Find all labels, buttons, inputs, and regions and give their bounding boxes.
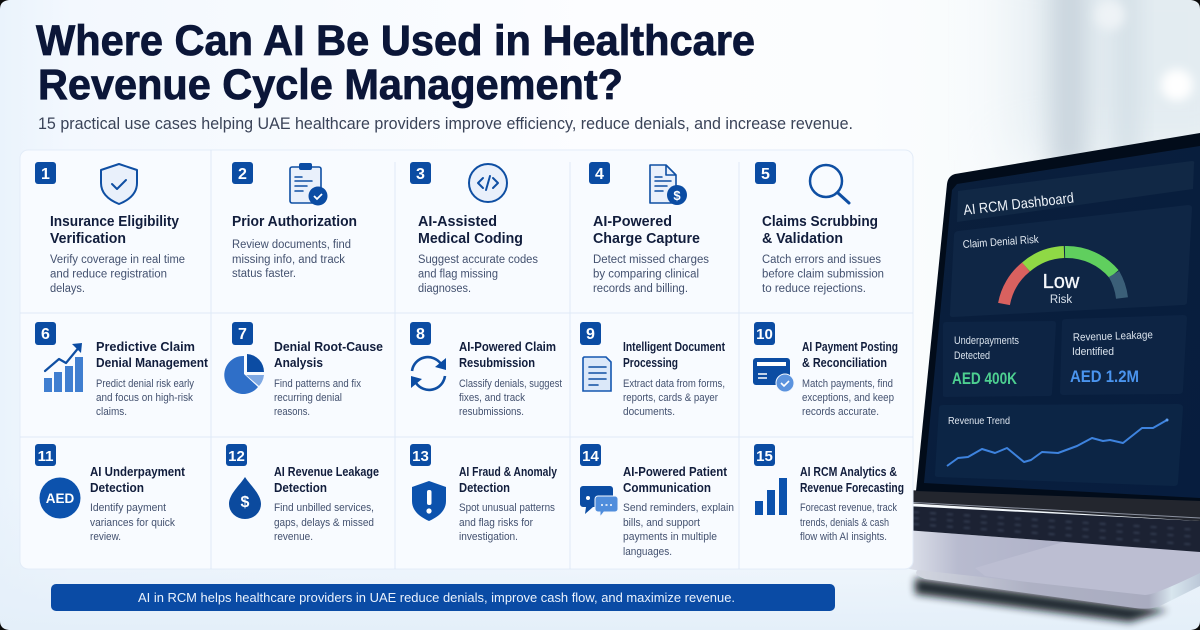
header bar (957, 161, 1194, 222)
KPI: revenue leakage (1060, 315, 1187, 395)
description: Find unbilled services, (274, 502, 374, 514)
icon: magnifier (810, 165, 849, 203)
description (762, 254, 884, 295)
card 8: AI-powered claim resubmission (410, 322, 562, 418)
badge 12 (226, 444, 247, 466)
description: Match payments, find (802, 378, 893, 390)
icon: alert shield (412, 481, 446, 521)
heading: AI Fraud & Anomaly (459, 464, 558, 479)
badge 11: 11 (38, 448, 53, 465)
description: gaps, delays & missed (274, 517, 374, 529)
description: status faster. (232, 268, 296, 280)
badge 10: 10 (756, 326, 773, 343)
heading (459, 464, 558, 495)
description (459, 502, 555, 543)
description: payments in multiple (623, 531, 717, 543)
icon: payment card check (753, 358, 794, 392)
description (96, 378, 194, 418)
claim denial risk gauge: Risk (1050, 294, 1072, 306)
card 11: AI underpayment detection (35, 444, 186, 543)
badge 10 (754, 322, 775, 345)
description: and reduce registration (50, 268, 167, 280)
badge 3: 3 (416, 166, 425, 183)
description: fixes, and track (459, 392, 525, 404)
badge 7 (232, 322, 253, 345)
heading (418, 214, 523, 247)
heading: AI-Assisted (418, 214, 497, 230)
badge 6: 6 (41, 326, 50, 343)
description: Find patterns and fix (274, 378, 361, 390)
description: reasons. (274, 406, 310, 418)
description: and flag missing (418, 268, 498, 280)
laptop base (905, 530, 1200, 622)
card 5: claims scrubbing and validation (755, 162, 884, 295)
description: reports, cards & payer (623, 392, 718, 404)
description (418, 254, 538, 295)
description (90, 502, 175, 543)
description: Suggest accurate codes (418, 254, 538, 266)
description (232, 239, 351, 280)
description (802, 378, 894, 418)
badge 5: 5 (761, 166, 770, 183)
heading (50, 214, 179, 247)
heading: Detection (459, 480, 510, 495)
heading: AI Payment Posting (802, 339, 898, 354)
description: Verify coverage in real time (50, 254, 185, 266)
heading (800, 464, 904, 495)
description (274, 378, 361, 418)
heading (623, 464, 728, 495)
KPI: underpayments (943, 321, 1056, 397)
description: Forecast revenue, track (800, 502, 897, 514)
laptop with AI RCM dashboard (905, 133, 1200, 622)
description (800, 502, 897, 543)
icon: AED coin (40, 478, 80, 518)
KPI: revenue leakage: Identified (1072, 346, 1114, 358)
blurred office backdrop (1020, 0, 1200, 170)
description: bills, and support (623, 517, 700, 529)
card 7: denial root-cause analysis (224, 322, 383, 418)
card 2: prior authorization (232, 162, 357, 280)
heading: Detection (90, 480, 144, 495)
badge 14: 14 (582, 448, 599, 465)
description: Detect missed charges (593, 254, 709, 266)
description (459, 378, 562, 418)
card 9: intelligent document processing (580, 322, 726, 418)
description: Predict denial risk early (96, 378, 194, 390)
KPI: revenue leakage: AED 1.2M (1070, 367, 1139, 386)
description: variances for quick (90, 517, 175, 529)
description: records accurate. (802, 406, 879, 418)
claim denial risk gauge: Claim Denial Risk (962, 234, 1039, 251)
description: records and billing. (593, 283, 688, 295)
card 14: AI-powered patient communication (580, 444, 734, 558)
description (593, 254, 709, 295)
badge 15: 15 (756, 448, 773, 465)
heading: Revenue Forecasting (800, 480, 904, 495)
heading: Denial Root-Cause (274, 339, 383, 354)
title: Where Can AI Be Used in Healthcare (36, 17, 755, 65)
heading (762, 214, 878, 247)
description: review. (90, 531, 121, 543)
badge 8: 8 (416, 326, 425, 343)
keyboard (905, 506, 1200, 552)
KPI: underpayments: AED 400K (952, 369, 1018, 388)
description: recurring denial (274, 392, 342, 404)
KPI: underpayments: Underpayments (954, 335, 1019, 347)
heading: Detection (274, 480, 327, 495)
description: diagnoses. (418, 283, 471, 295)
description: investigation. (459, 531, 518, 543)
icon: bar chart (755, 478, 787, 515)
card 3: AI-assisted medical coding (410, 162, 538, 295)
heading (593, 214, 700, 247)
badge 8 (410, 322, 431, 345)
description: Review documents, find (232, 239, 351, 251)
card 10: AI payment posting and reconciliation (753, 322, 898, 418)
badge 13 (410, 444, 431, 466)
heading (274, 464, 379, 495)
description: Extract data from forms, (623, 378, 725, 390)
heading (623, 339, 726, 370)
heading: AI Revenue Leakage (274, 464, 379, 479)
card 12: AI revenue leakage detection (226, 444, 379, 543)
heading: & Reconciliation (802, 355, 887, 370)
heading (90, 464, 186, 495)
description: Catch errors and issues (762, 254, 881, 266)
description (50, 254, 185, 295)
description: to reduce rejections. (762, 283, 866, 295)
description: trends, denials & cash (800, 517, 889, 529)
description: resubmissions. (459, 406, 524, 418)
description: documents. (623, 406, 675, 418)
heading: Resubmission (459, 355, 535, 370)
heading: Denial Management (96, 355, 209, 370)
card 1: insurance eligibility verification (35, 162, 185, 295)
description: claims. (96, 406, 127, 418)
card 13: AI fraud and anomaly detection (410, 444, 558, 543)
description: languages. (623, 546, 672, 558)
badge 9 (580, 322, 601, 345)
description: missing info, and track (232, 254, 345, 266)
hinge (905, 490, 1200, 521)
card 15: AI RCM analytics and revenue forecasting (754, 444, 904, 543)
icon: dollar drop (229, 477, 261, 519)
icon: shield check (101, 164, 137, 204)
heading (274, 339, 383, 370)
title: Revenue Cycle Management? (38, 61, 623, 109)
heading: AI Underpayment (90, 464, 186, 479)
title (36, 17, 755, 109)
description: before claim submission (762, 268, 884, 280)
heading: Claims Scrubbing (762, 214, 878, 230)
badge 13: 13 (412, 448, 429, 465)
heading: Prior Authorization (232, 214, 357, 230)
icon: clipboard check (290, 163, 328, 206)
description: Spot unusual patterns (459, 502, 555, 514)
screen surface (924, 146, 1200, 498)
badge 7: 7 (238, 326, 247, 343)
KPI: underpayments: Detected (954, 350, 990, 362)
description: and flag risks for (459, 517, 533, 529)
description: Classify denials, suggest (459, 378, 562, 390)
description: exceptions, and keep (802, 392, 894, 404)
icon: code circle (469, 164, 507, 202)
heading (459, 339, 556, 370)
description (623, 378, 725, 418)
description: by comparing clinical (593, 268, 699, 280)
heading: Analysis (274, 355, 323, 370)
card 4: AI-powered charge capture (589, 162, 709, 295)
badge 15 (754, 444, 775, 466)
description: revenue. (274, 531, 313, 543)
description: flow with AI insights. (800, 531, 887, 543)
badge 2: 2 (238, 166, 247, 183)
heading: AI-Powered (593, 214, 672, 230)
description: Identify payment (90, 502, 166, 514)
banner: key takeaway: AI in RCM helps healthcare providers in UAE reduce denials, improve cash flow, and maximize revenue. (138, 590, 735, 605)
heading: Intelligent Document (623, 339, 726, 354)
icon: chat bubbles (580, 486, 618, 517)
icon: refresh arrows (411, 357, 446, 390)
badge 1 (35, 162, 56, 184)
claim denial risk gauge (950, 205, 1192, 317)
description (623, 502, 734, 558)
heading: & Validation (762, 231, 843, 247)
heading (96, 339, 209, 370)
heading: Predictive Claim (96, 339, 195, 354)
card 6: predictive claim denial management (35, 322, 209, 418)
heading: Insurance Eligibility (50, 214, 179, 230)
icon: rising bars (44, 343, 83, 392)
description: delays. (50, 283, 85, 295)
icon: pie chart (224, 354, 264, 394)
revenue trend chart: Revenue Trend (948, 415, 1010, 427)
description (274, 502, 374, 543)
heading: Communication (623, 480, 711, 495)
KPI: revenue leakage: Revenue Leakage (1073, 329, 1153, 344)
icon: dollar drop: $ (241, 494, 250, 511)
heading: Charge Capture (593, 231, 700, 247)
badge 9: 9 (586, 326, 595, 343)
claim denial risk gauge: Low (1043, 271, 1080, 293)
icon: document dollar: $ (673, 188, 681, 203)
heading: Medical Coding (418, 231, 523, 247)
description: and focus on high-risk (96, 392, 193, 404)
badge 6 (35, 322, 56, 345)
badge 12: 12 (228, 448, 245, 465)
badge 1: 1 (41, 166, 50, 183)
badge 11 (35, 444, 56, 466)
icon: AED coin: AED (46, 491, 74, 506)
heading: AI RCM Analytics & (800, 464, 897, 479)
description: Send reminders, explain (623, 502, 734, 514)
subtitle: 15 practical use cases helping UAE healthcare providers improve efficiency, reduce denials, and increase revenue. (38, 115, 853, 133)
screen bezel (916, 133, 1200, 501)
badge 4: 4 (595, 166, 604, 183)
heading: Verification (50, 231, 126, 247)
panel: use case grid (20, 150, 913, 569)
badge 14 (580, 444, 601, 466)
banner: key takeaway (51, 584, 835, 611)
header bar: AI RCM Dashboard (963, 191, 1075, 219)
revenue trend chart (935, 404, 1183, 486)
heading: AI-Powered Claim (459, 339, 556, 354)
heading: AI-Powered Patient (623, 464, 728, 479)
heading: Processing (623, 355, 678, 370)
icon: document lines (583, 357, 611, 391)
heading (802, 339, 898, 370)
